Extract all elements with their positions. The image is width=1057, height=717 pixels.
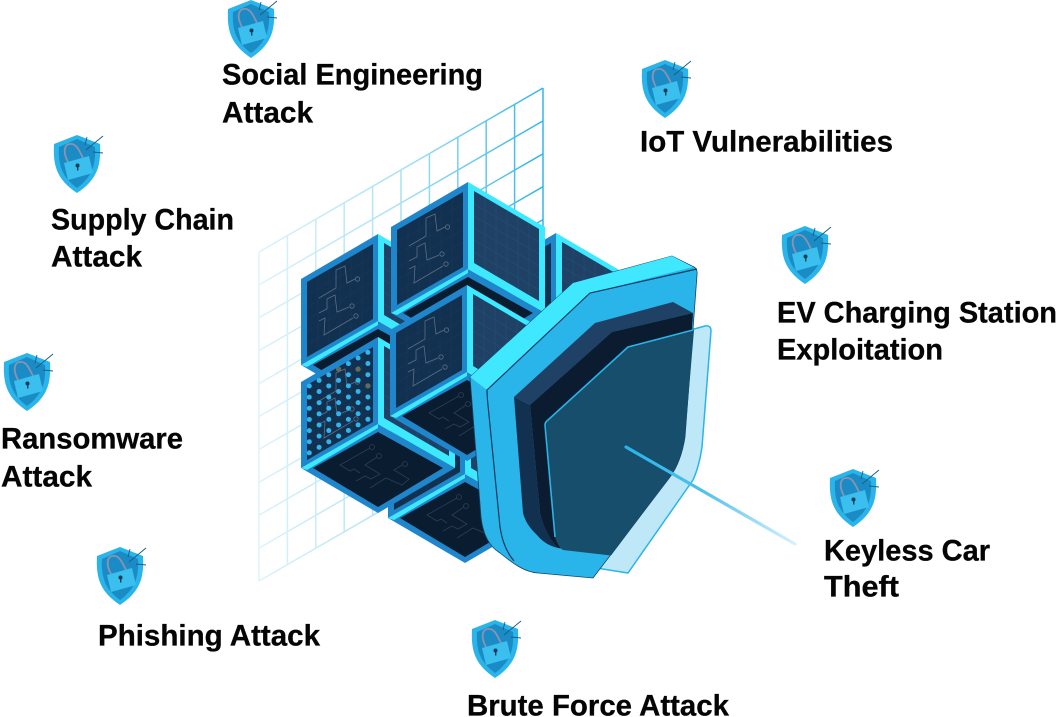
icon: shield lock bbox=[782, 226, 831, 284]
text: IoT Vulnerabilities: IoT Vulnerabilities bbox=[640, 126, 893, 158]
label: ransomware bbox=[1, 353, 183, 494]
cube: lower centre bbox=[388, 387, 542, 563]
dot matrix on cube face bbox=[307, 350, 370, 455]
shield top bevel bbox=[470, 256, 693, 390]
cube: back right bbox=[479, 233, 633, 409]
text: EV Charging Station Exploitation bbox=[777, 296, 1057, 366]
cube: middle centre bbox=[390, 285, 544, 461]
cube: upper left bbox=[301, 234, 455, 410]
shield bbox=[470, 256, 697, 578]
cube: dotted face bbox=[301, 337, 455, 513]
icon: shield lock bbox=[97, 547, 146, 605]
text: Social Engineering Attack bbox=[222, 58, 483, 130]
text: Ransomware Attack: Ransomware bbox=[1, 422, 183, 456]
label: EV charging bbox=[777, 226, 1057, 366]
icon: shield lock bbox=[54, 135, 103, 193]
icon: shield lock bbox=[642, 60, 691, 118]
glass panel edge bbox=[545, 330, 693, 537]
shield body bbox=[470, 256, 697, 578]
text: Social Engineering Attack: Attack bbox=[222, 96, 313, 130]
background grid bbox=[259, 88, 543, 581]
label: phishing bbox=[97, 547, 320, 652]
shield inner side bbox=[514, 397, 558, 548]
text: Keyless Car Theft bbox=[824, 534, 990, 604]
shield inner top bbox=[514, 302, 693, 405]
label: keyless car bbox=[824, 469, 990, 604]
text: Supply Chain Attack bbox=[51, 204, 234, 274]
text: EV Charging Station Exploitation: Exploitation bbox=[777, 334, 943, 366]
glass panel front bbox=[546, 330, 694, 556]
text: Supply Chain Attack: Attack bbox=[51, 240, 142, 274]
pointer line bbox=[626, 447, 795, 544]
text: Phishing Attack: Phishing Attack bbox=[98, 620, 320, 652]
text: Ransomware Attack bbox=[1, 422, 183, 494]
icon: shield lock bbox=[228, 0, 277, 58]
label: social engineering bbox=[222, 0, 483, 130]
shield bevel edge bbox=[487, 269, 697, 561]
shield inner front bbox=[530, 313, 693, 555]
label: IoT bbox=[640, 60, 893, 158]
server cube stack bbox=[301, 182, 633, 563]
glass panel behind shield bbox=[545, 326, 711, 573]
text: Ransomware Attack: Attack bbox=[1, 460, 92, 494]
cube: upper centre bbox=[391, 182, 545, 358]
icon: shield lock bbox=[4, 353, 53, 411]
text: Keyless Car Theft: Theft bbox=[824, 570, 899, 604]
text: Social Engineering Attack: Social Engineering bbox=[222, 58, 483, 92]
icon: shield lock bbox=[830, 469, 879, 527]
icon: shield lock bbox=[472, 620, 521, 678]
text: Supply Chain Attack: Supply Chain bbox=[51, 204, 234, 236]
text: Keyless Car Theft: Keyless Car bbox=[824, 534, 990, 568]
label: supply chain bbox=[51, 135, 234, 274]
label: brute force bbox=[467, 620, 729, 717]
